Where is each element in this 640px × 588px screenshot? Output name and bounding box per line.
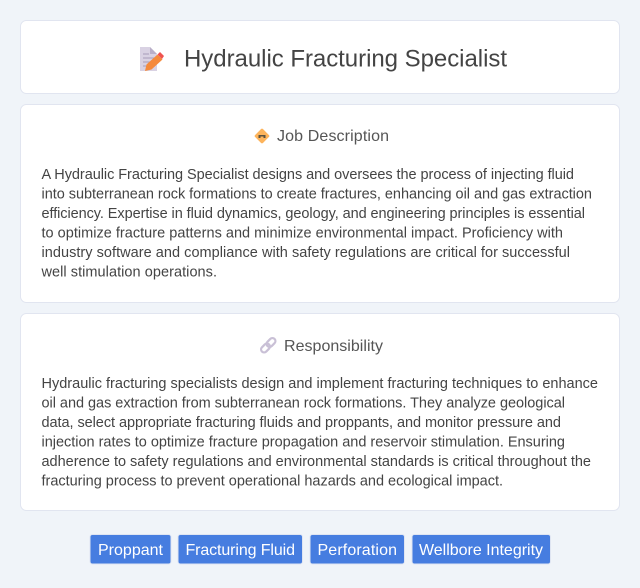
tag: Fracturing Fluid xyxy=(178,534,302,564)
tag: Wellbore Integrity: Wellbore Integrity xyxy=(419,542,543,559)
tag: Perforation xyxy=(310,534,404,564)
text block: responsibility: Hydraulic fracturing specialists design and implement fracturing techniques to enhance xyxy=(42,376,598,392)
text block: responsibility: injection rates to optimize fracture propagation and reservoir stimulation. Ensuring xyxy=(42,434,565,450)
text block: responsibility: adherence to safety regulations and environmental standards is critical throughout the xyxy=(42,454,591,470)
panel: job description xyxy=(20,104,620,302)
text block: responsibility xyxy=(42,376,598,490)
panel: responsibility xyxy=(20,314,620,510)
text block: job description xyxy=(40,167,592,280)
icon: chain link xyxy=(260,337,277,354)
text block: job description: industry software and compliance with safety regulations are critical for successful xyxy=(42,245,570,261)
tag: Proppant xyxy=(90,534,171,564)
heading: job description: Job Description xyxy=(277,128,389,145)
tag: Perforation: Perforation xyxy=(318,542,397,559)
text block: job description: efficiency. Expertise in fluid dynamics, geology, and engineering principles is essential xyxy=(42,206,585,222)
panel: title card xyxy=(20,20,620,94)
text block: job description: A Hydraulic Fracturing Specialist designs and oversees the process of injecting fluid xyxy=(42,167,574,183)
text block: responsibility: fracturing process to prevent operational hazards and ecological impact. xyxy=(42,474,503,490)
text block: job description: to optimize fracture patterns and minimize environmental impact. Proficiency with xyxy=(42,226,563,242)
icon: document with pencil xyxy=(140,47,164,71)
tag: Proppant: Proppant xyxy=(98,542,164,559)
text block: job description: into subterranean rock formations to create fractures, enhancing oil and gas extraction xyxy=(42,186,592,202)
icon: orange diamond xyxy=(254,128,270,144)
tag: Wellbore Integrity xyxy=(412,534,550,564)
tag: Fracturing Fluid: Fracturing Fluid xyxy=(186,542,295,559)
heading: title: Hydraulic Fracturing Specialist xyxy=(184,46,507,72)
text block: responsibility: data, select appropriate fracturing fluids and proppants, and monitor pressure and xyxy=(42,415,561,431)
text block: responsibility: oil and gas extraction from subterranean rock formations. They analyze geological xyxy=(42,396,565,412)
text block: job description: well stimulation operations. xyxy=(40,264,217,280)
heading: responsibility: Responsibility xyxy=(284,338,383,355)
